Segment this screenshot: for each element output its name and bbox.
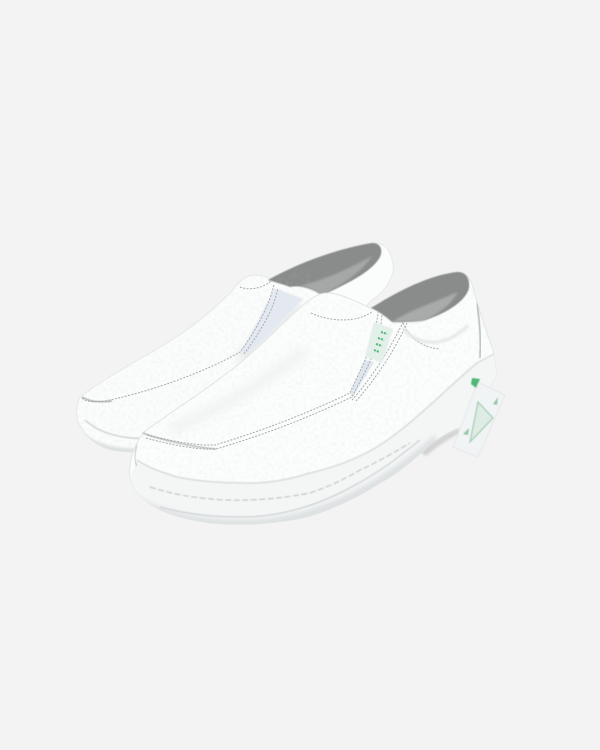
right shoe sole shading [130, 356, 497, 501]
tag card [453, 382, 505, 457]
green tag triangle [470, 402, 493, 442]
right shoe elastic gusset [350, 360, 374, 398]
left shoe body [77, 243, 393, 452]
shadow under shoe arch [420, 428, 460, 456]
left shoe shading [84, 284, 300, 452]
hang tag [453, 378, 505, 457]
right shoe sole welt stitching [150, 443, 410, 500]
left shoe elastic gusset [240, 288, 303, 354]
right shoe inner lining [371, 272, 469, 322]
right shoe body [130, 272, 497, 524]
left shoe inner lining [268, 243, 381, 295]
product photo: pair of white shoes [76, 242, 505, 525]
green side label on shoe [365, 322, 393, 363]
collar padding shading [403, 325, 468, 342]
left shoe stitching [82, 280, 278, 402]
green tag corner marks [471, 378, 480, 388]
left shoe (rear) [70, 243, 393, 462]
right shoe leather grain [172, 352, 451, 434]
right shoe heel seam [477, 303, 480, 358]
right shoe stitching [146, 311, 440, 449]
right shoe (front) [125, 270, 500, 530]
